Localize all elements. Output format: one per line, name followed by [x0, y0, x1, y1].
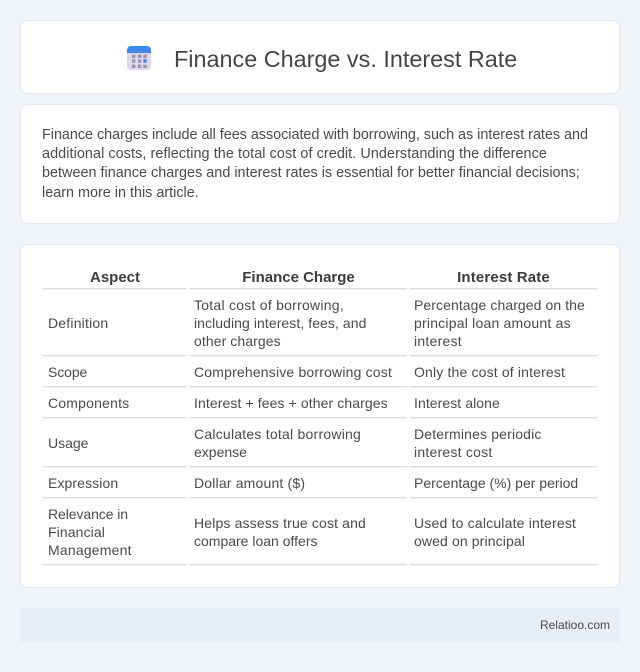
- row: Components: Interest + fees + other charges: [194, 395, 388, 411]
- row: Relevance in Financial Management: Relevance in: [48, 506, 128, 522]
- row: Definition: Definition: [48, 315, 108, 331]
- row: Scope: Only the cost of interest: [414, 364, 565, 380]
- row: Usage: Usage: [48, 435, 88, 451]
- heading: Finance Charge: Finance Charge: [242, 269, 355, 286]
- row: Components: Components: [48, 395, 129, 411]
- row: Components: [43, 395, 597, 419]
- row: Definition: other charges: [194, 333, 281, 349]
- row: Scope: Comprehensive borrowing cost: [194, 364, 392, 380]
- row: Usage: [43, 426, 597, 468]
- row: Definition: [43, 297, 597, 357]
- table: comparison: [43, 269, 597, 566]
- heading: Aspect: Aspect: [90, 269, 140, 286]
- row: Usage: Calculates total borrowing: [194, 426, 361, 442]
- row: Scope: [43, 364, 597, 388]
- row: table header: [43, 269, 597, 290]
- row: Relevance in Financial Management: Helps assess true cost and: [194, 515, 366, 531]
- row: Relevance in Financial Management: compare loan offers: [194, 533, 317, 549]
- text block: introduction: additional costs, reflecting the total cost of credit. Understanding the difference: [42, 146, 547, 162]
- row: Usage: Determines periodic: [414, 426, 542, 442]
- row: Usage: interest cost: [414, 444, 492, 460]
- row: Relevance in Financial Management: Financial: [48, 524, 105, 540]
- row: Definition: principal loan amount as: [414, 315, 571, 331]
- row: Scope: Scope: [48, 364, 87, 380]
- text block: introduction: learn more in this article.: [42, 185, 199, 201]
- row: Usage: expense: [194, 444, 247, 460]
- footer bar: [20, 608, 620, 642]
- row: Definition: Total cost of borrowing,: [194, 297, 344, 313]
- panel: introduction: [20, 104, 620, 224]
- text block: introduction: Finance charges include all fees associated with borrowing, such as interest rates and: [42, 127, 588, 143]
- row: Relevance in Financial Management: owed on principal: [414, 533, 525, 549]
- panel: comparison table: [20, 244, 620, 588]
- text block: introduction: [42, 127, 588, 201]
- row: Relevance in Financial Management: [43, 506, 597, 566]
- row: Definition: interest: [414, 333, 462, 349]
- title: Finance Charge vs. Interest Rate: [174, 46, 517, 72]
- row: Expression: Percentage (%) per period: [414, 475, 578, 491]
- row: Expression: Expression: [48, 475, 118, 491]
- row: Components: Interest alone: [414, 395, 500, 411]
- row: Definition: Percentage charged on the: [414, 297, 585, 313]
- footer: site name: Relatioo.com: [540, 618, 610, 632]
- row: Relevance in Financial Management: Management: [48, 542, 132, 558]
- icon: calendar: [127, 46, 151, 70]
- panel: title header: [20, 20, 620, 94]
- heading: Interest Rate: Interest Rate: [457, 269, 550, 286]
- row: Definition: including interest, fees, and: [194, 315, 366, 331]
- row: Expression: [43, 475, 597, 499]
- text block: introduction: between finance charges and interest rates is essential for better financial decisions;: [42, 165, 580, 181]
- row: Expression: Dollar amount ($): [194, 475, 305, 491]
- row: Relevance in Financial Management: Used to calculate interest: [414, 515, 576, 531]
